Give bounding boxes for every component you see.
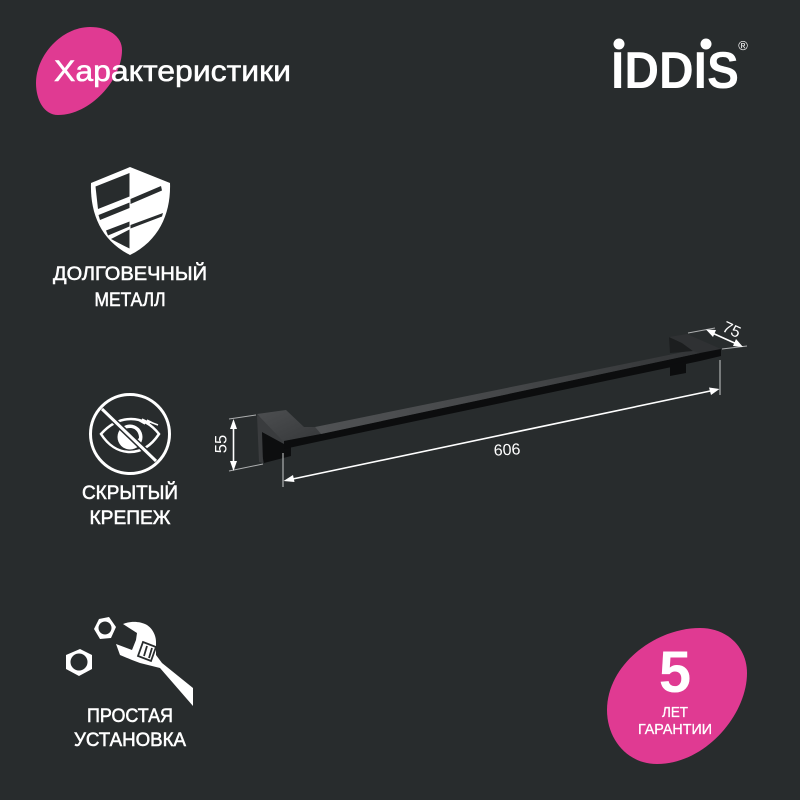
feature: hidden fastening bbox=[82, 394, 178, 529]
dimension 75 bbox=[688, 319, 747, 349]
pink blob bbox=[607, 628, 747, 764]
pink blob behind heading bbox=[36, 27, 122, 115]
label: installation: УСТАНОВКА bbox=[74, 730, 186, 751]
registered mark: ® bbox=[738, 38, 748, 53]
icon: crossed eye bbox=[90, 394, 170, 474]
feature: easy installation bbox=[66, 617, 193, 751]
dimension 606: 606 bbox=[493, 441, 521, 460]
heading: characteristics bbox=[36, 27, 291, 115]
label: fastening: КРЕПЕЖ bbox=[90, 508, 171, 529]
right bracket front edge bbox=[700, 349, 721, 361]
dimension 606 bbox=[283, 360, 720, 487]
logo i dots bbox=[614, 38, 712, 50]
label: easy: ПРОСТАЯ bbox=[87, 706, 173, 727]
bar black underside bbox=[321, 353, 700, 441]
heading text: Характеристики bbox=[54, 55, 291, 88]
warranty label: years: ЛЕТ bbox=[662, 705, 688, 721]
feature: durable metal bbox=[53, 167, 207, 311]
warranty label: guarantee: ГАРАНТИИ bbox=[638, 722, 712, 738]
shadow under left bracket bbox=[258, 432, 291, 463]
label: durable metal: ДОЛГОВЕЧНЫЙ bbox=[53, 263, 207, 285]
right bracket wall plate bbox=[669, 337, 693, 353]
warranty badge bbox=[607, 628, 747, 764]
label: hidden: СКРЫТЫЙ bbox=[82, 482, 178, 504]
product: towel bar bbox=[257, 334, 721, 463]
warranty number: 5 bbox=[659, 640, 691, 705]
bar top face bbox=[315, 350, 700, 434]
left bracket wall face bbox=[257, 415, 284, 463]
icon: shield bbox=[91, 167, 170, 255]
left bracket front edge bbox=[284, 434, 321, 449]
dimension 55: 55 bbox=[212, 435, 230, 453]
dimensions bbox=[212, 319, 747, 487]
logo wordmark: IDDIS bbox=[611, 42, 739, 100]
icon: nuts and wrench bbox=[66, 617, 193, 706]
label line 2: МЕТАЛЛ bbox=[94, 290, 166, 311]
left bracket top face bbox=[257, 410, 321, 441]
right bracket clip bbox=[670, 361, 686, 376]
brand logo bbox=[611, 38, 748, 100]
dimension 55 bbox=[212, 415, 263, 471]
dimension 75: 75 bbox=[720, 319, 743, 342]
right bracket top face bbox=[669, 334, 721, 353]
